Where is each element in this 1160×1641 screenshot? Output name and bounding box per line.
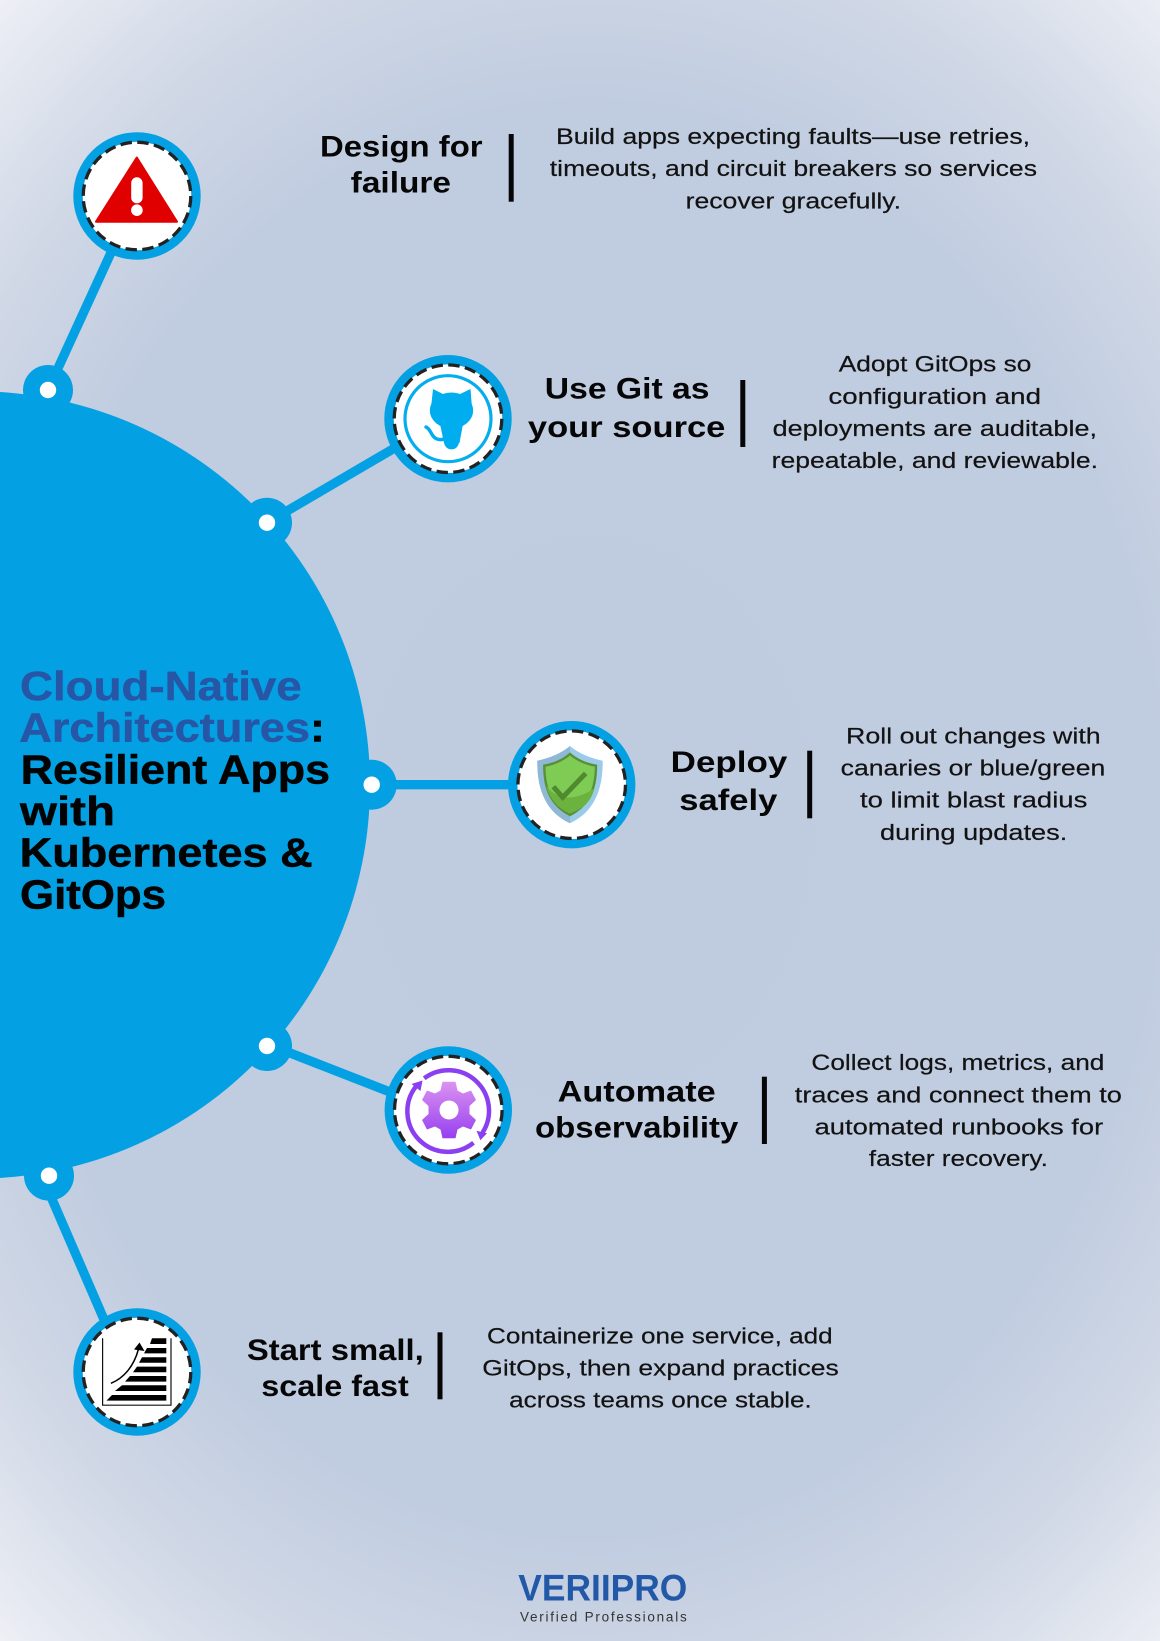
text: automate observability description: automated runbooks for [815,1114,1104,1139]
text: use git description: deployments are auditable, [773,416,1097,441]
text: automate observability description: traces and connect them to [795,1082,1122,1107]
text: design for failure description: timeouts, and circuit breakers so services [550,156,1037,181]
text: design for failure description [550,124,1037,213]
text: automate observability description [795,1050,1122,1171]
logo: VeriiPro [518,1568,687,1625]
text: use git description: repeatable, and reviewable. [772,448,1098,473]
heading: automate observability [535,1076,739,1144]
heading: design for failure: failure [351,167,451,200]
heading: use git as your source: Use Git as [545,372,710,405]
heading: start small, scale fast [247,1334,424,1403]
central hub circle [0,391,370,1179]
text: deploy safely description: Roll out changes with [846,723,1101,748]
logo: VeriiPro: VERIIPRO [518,1568,687,1609]
heading: automate observability: observability [535,1111,739,1144]
title: GitOps [20,871,166,917]
heading: use git as your source: your source [528,411,725,444]
text: use git description: Adopt GitOps so [839,352,1031,377]
text: start small description: across teams once stable. [509,1388,812,1413]
heading: deploy safely: safely [679,784,778,817]
title: with [19,788,115,834]
text: start small description: GitOps, then expand practices [482,1356,839,1381]
heading: deploy safely [671,746,788,817]
text: deploy safely description: to limit blast radius [860,788,1087,813]
icon: gear with cycle arrows [389,1051,507,1169]
heading: design for failure: Design for [320,131,483,164]
title: Architectures : [19,705,325,751]
connector nodes [23,365,397,1201]
text: deploy safely description: canaries or blue/green [841,756,1105,781]
icon: git octocat [389,360,507,478]
title: Resilient Apps [21,746,330,792]
icon: green shield [513,726,631,844]
text: start small description: Containerize one service, add [487,1323,833,1348]
connector lines [42,196,572,1345]
text: design for failure description: Build apps expecting faults—use retries, [556,124,1030,149]
title [19,663,330,917]
text: start small description [482,1323,839,1413]
heading: start small, scale fast: scale fast [261,1370,409,1403]
heading: start small, scale fast: Start small, [247,1334,424,1367]
text: design for failure description: recover gracefully. [686,188,901,213]
heading: design for failure [320,131,483,200]
text: automate observability description: faster recovery. [869,1146,1048,1171]
logo: VeriiPro: Verified Professionals [520,1610,687,1625]
icon: growth staircase chart [78,1313,196,1431]
title: Cloud-Native [20,663,302,709]
heading: automate observability: Automate [558,1076,716,1109]
heading: use git as your source [528,372,725,444]
text: use git description [772,352,1098,473]
text: deploy safely description [841,723,1105,845]
text: automate observability description: Collect logs, metrics, and [811,1050,1104,1075]
icon: warning triangle [78,137,196,255]
panel: design for failure [78,124,1037,255]
heading: deploy safely: Deploy [671,746,788,779]
text: deploy safely description: during updates. [880,820,1067,845]
panel: deploy safely [513,723,1105,845]
panel: start small, scale fast [78,1313,839,1431]
panel: automate observability [389,1050,1122,1171]
title: Kubernetes & [20,830,313,876]
panel: use git as your source [389,352,1098,478]
text: use git description: configuration and [828,384,1041,409]
